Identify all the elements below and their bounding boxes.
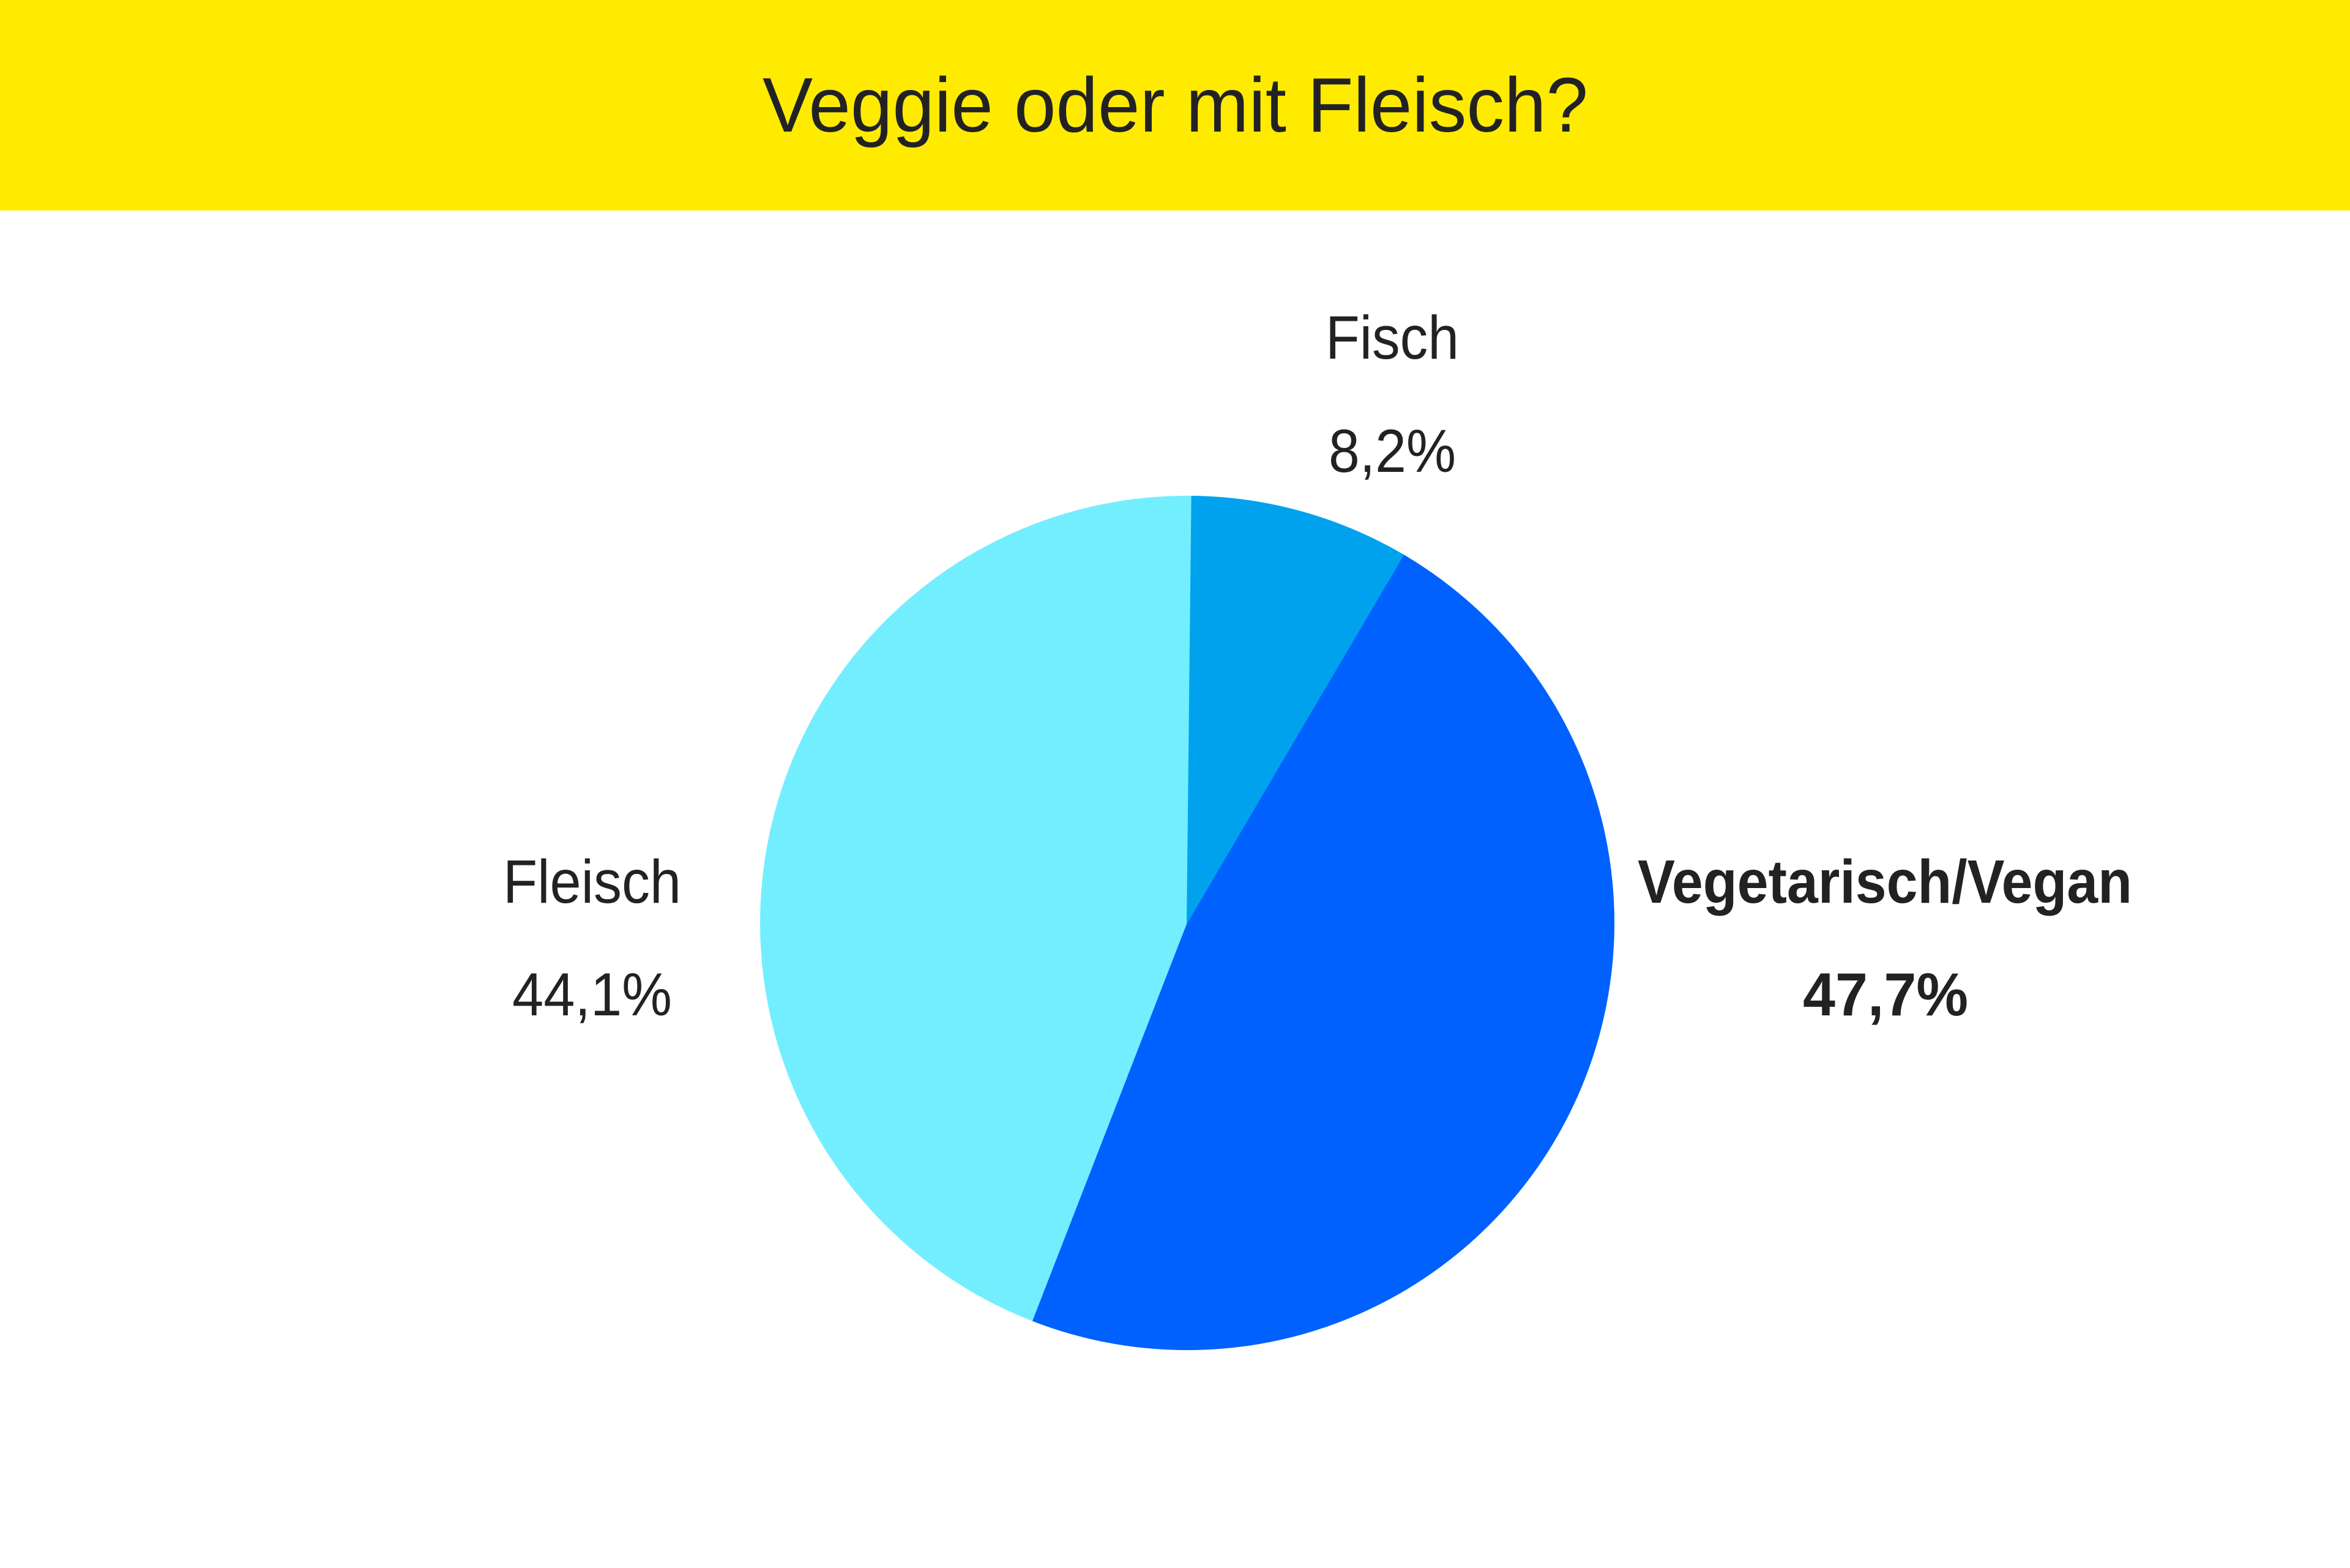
label: Fleisch	[503, 848, 681, 1028]
slice: Fleisch 44,1%	[734, 477, 1640, 1371]
header banner	[0, 0, 2350, 211]
slice: Fisch 8,2%	[1187, 496, 1405, 924]
title: Veggie oder mit Fleisch?	[763, 62, 1588, 148]
label: Vegetarisch/Vegan: 47,7%	[1803, 960, 1968, 1028]
label: Fisch: 8,2%	[1329, 417, 1456, 485]
label: Fisch: Fisch	[1326, 304, 1459, 372]
label: Fisch	[1326, 304, 1459, 485]
label: Vegetarisch/Vegan	[1638, 848, 2132, 1028]
label: Fleisch: 44,1%	[512, 960, 672, 1028]
label: Fleisch: Fleisch	[503, 848, 681, 916]
label: Vegetarisch/Vegan: Vegetarisch/Vegan	[1638, 848, 2132, 916]
slice: Vegetarisch/Vegan 47,7%	[1032, 554, 1614, 1350]
pie chart	[760, 496, 1614, 1350]
